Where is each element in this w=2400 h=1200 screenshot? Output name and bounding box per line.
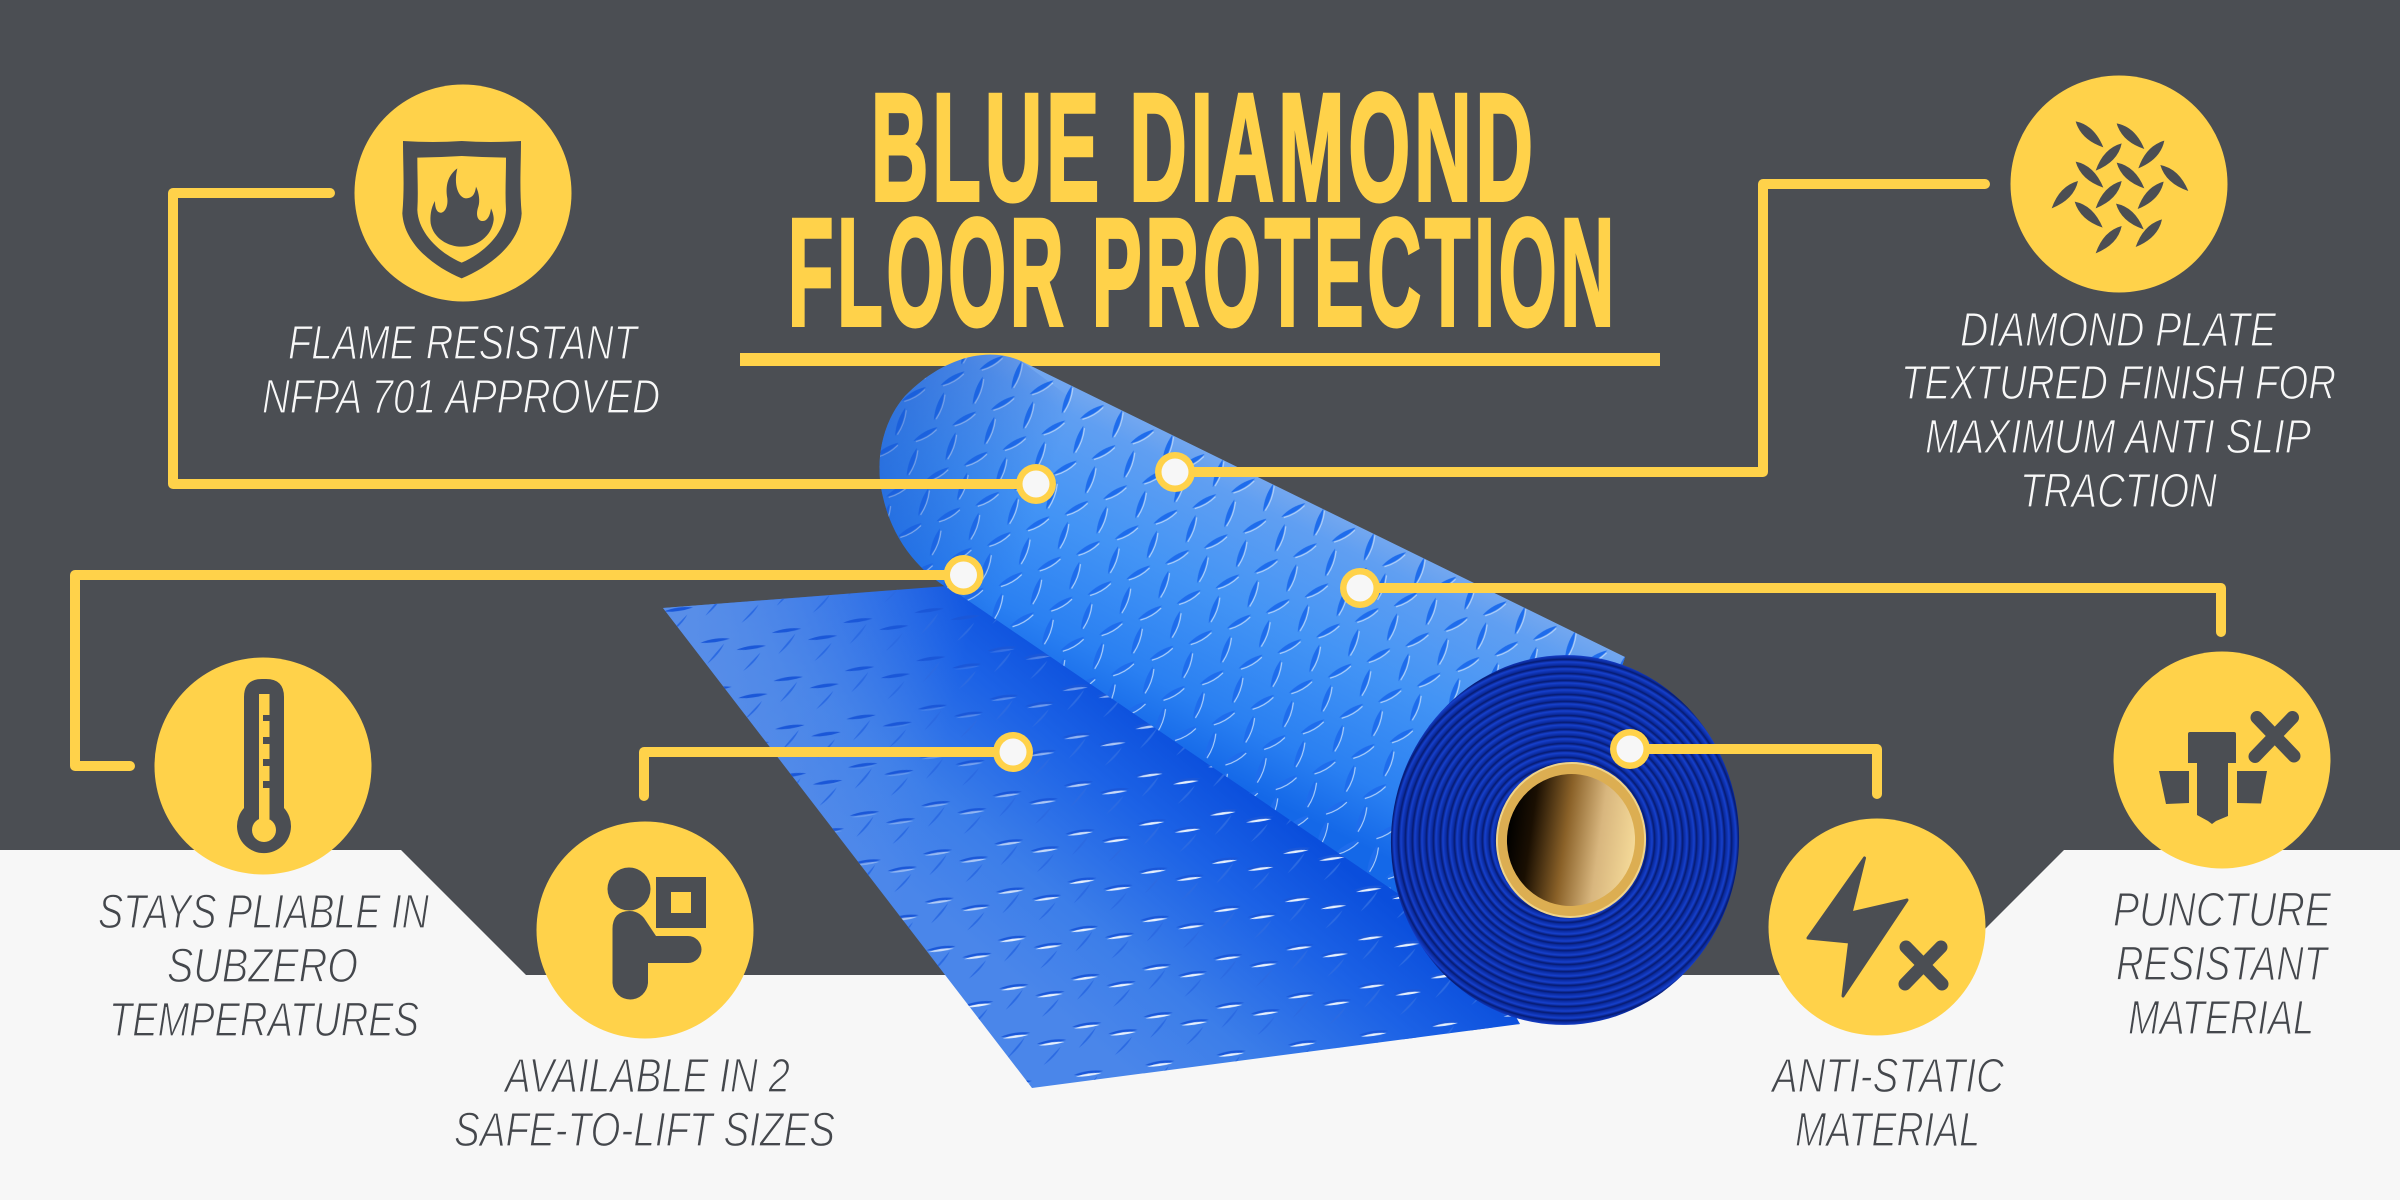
flame resistant label: NFPA 701 APPROVED <box>262 371 660 424</box>
icon: puncture nail with x <box>2114 652 2330 868</box>
title underline <box>740 353 1660 366</box>
roll body <box>879 355 1625 895</box>
safe-to-lift label <box>454 1050 835 1157</box>
flame resistant label <box>262 317 660 424</box>
puncture resistant label: PUNCTURE <box>2113 884 2332 937</box>
diamond plate label: DIAMOND PLATE <box>1960 304 2277 357</box>
title <box>788 62 1618 358</box>
puncture resistant label <box>2113 884 2332 1045</box>
connector: subzero temperatures <box>75 555 984 766</box>
anti-static label: MATERIAL <box>1795 1104 1980 1157</box>
diamond plate label: TRACTION <box>2020 465 2217 518</box>
safe-to-lift label: SAFE-TO-LIFT SIZES <box>454 1104 835 1157</box>
connector: diamond plate <box>1155 184 1985 492</box>
subzero label: TEMPERATURES <box>109 994 419 1047</box>
anti-static label <box>1770 1050 2004 1157</box>
diamond plate label: MAXIMUM ANTI SLIP <box>1925 411 2311 464</box>
light lower panel <box>0 850 2400 1200</box>
flame resistant label: FLAME RESISTANT <box>288 317 640 370</box>
icon: thermometer <box>154 658 372 874</box>
connector: anti-static <box>1610 729 1877 794</box>
subzero label: SUBZERO <box>167 940 358 993</box>
diamond plate label <box>1901 304 2336 518</box>
icon: lightning bolt with x <box>1768 818 1986 1036</box>
subzero label <box>98 886 429 1047</box>
puncture resistant label: MATERIAL <box>2128 992 2314 1045</box>
icon: diamond plate <box>2010 76 2228 292</box>
connector: puncture resistant <box>1340 568 2221 632</box>
title: BLUE DIAMOND <box>871 62 1537 233</box>
safe-to-lift label: AVAILABLE IN 2 <box>503 1050 790 1103</box>
anti-static label: ANTI-STATIC <box>1770 1050 2004 1103</box>
subzero label: STAYS PLIABLE IN <box>98 886 429 939</box>
icon: person lifting box <box>536 822 754 1038</box>
connector: safe-to-lift sizes <box>644 732 1033 796</box>
connector: flame resistant <box>173 193 1056 504</box>
product photo: blue diamond plate roll <box>663 355 1754 1088</box>
roll end with wound layers <box>1376 641 1754 1039</box>
unrolled sheet <box>663 585 1520 1088</box>
cardboard core <box>1487 753 1655 927</box>
puncture resistant label: RESISTANT <box>2116 938 2330 991</box>
icon: flame shield <box>354 84 572 302</box>
